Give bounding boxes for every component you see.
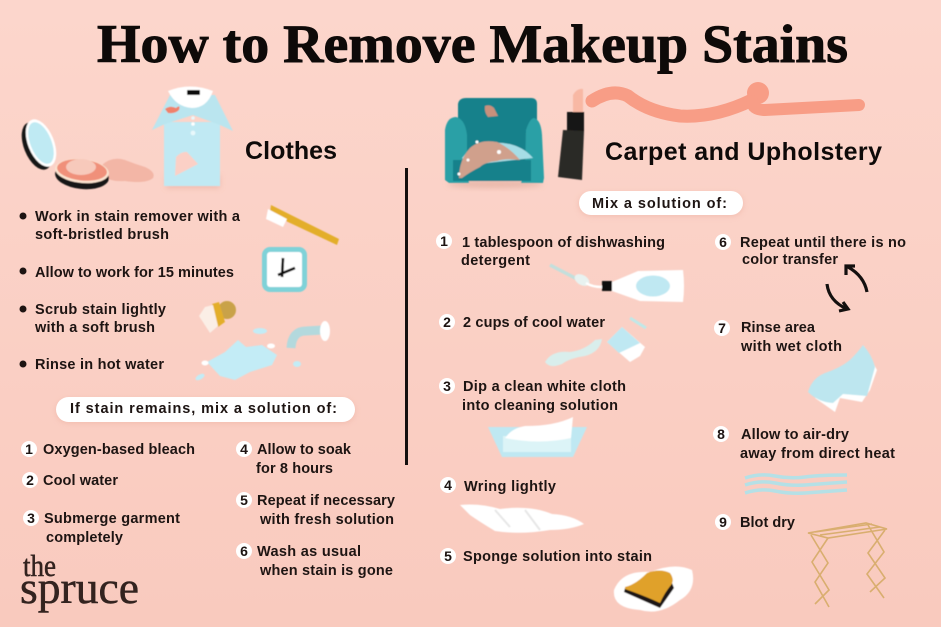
numbered steps: right column: 8	[717, 426, 725, 442]
icon: wet cloth	[808, 345, 877, 412]
title: How to Remove Makeup Stains	[97, 14, 848, 74]
numbered steps: right column: Rinse area	[741, 320, 816, 336]
numbered steps: clothes solution: Allow to soak	[257, 442, 352, 458]
bullet list: Allow to work for 15 minutes	[35, 265, 234, 281]
icon: air waves	[745, 475, 847, 493]
numbered steps: clothes solution: 5	[240, 492, 248, 508]
numbered steps: right column: away from direct heat	[740, 446, 895, 462]
numbered steps: right column: with wet cloth	[740, 339, 842, 355]
bullet list	[20, 209, 241, 373]
pill: if stain remains: If stain remains, mix a solution of:	[70, 401, 337, 417]
numbered steps: clothes solution	[21, 441, 395, 579]
pill: mix a solution	[579, 191, 743, 216]
numbered steps: clothes solution: Wash as usual	[257, 544, 361, 560]
icon: lipstick	[558, 89, 584, 180]
numbered steps: clothes solution: Repeat if necessary	[257, 493, 395, 509]
numbered steps: clothes solution: completely	[46, 530, 123, 546]
numbered steps: left column: 3	[443, 378, 451, 394]
numbered steps: left column: into cleaning solution	[462, 398, 618, 414]
numbered steps: clothes solution: 3	[27, 510, 35, 526]
bullet list: Work in stain remover with a	[35, 209, 241, 225]
panel: carpet and upholstery	[436, 82, 906, 612]
numbered steps: right column: Blot dry	[740, 515, 795, 531]
numbered steps: left column: 2	[443, 314, 451, 330]
pill: mix a solution: Mix a solution of:	[592, 196, 727, 212]
icon: lipstick smear	[592, 82, 859, 116]
panel: clothes	[16, 86, 395, 579]
numbered steps: right column: Allow to air-dry	[741, 427, 849, 443]
numbered steps: clothes solution: 2	[26, 472, 34, 488]
numbered steps: left column: 2 cups of cool water	[463, 315, 605, 331]
numbered steps: right column	[713, 234, 906, 531]
numbered steps: clothes solution: Oxygen-based bleach	[43, 442, 195, 458]
numbered steps: clothes solution: 1	[25, 441, 33, 457]
logo: the spruce: the	[23, 548, 56, 583]
numbered steps: left column: Wring lightly	[464, 479, 556, 495]
numbered steps: left column	[436, 233, 665, 565]
numbered steps: left column: 1	[440, 233, 448, 249]
numbered steps: clothes solution: with fresh solution	[259, 512, 394, 528]
numbered steps: left column: detergent	[461, 253, 530, 269]
icon: drying rack	[808, 523, 887, 607]
icon: makeup compact	[16, 115, 154, 192]
numbered steps: left column: Sponge solution into stain	[463, 549, 652, 565]
bullet list: Rinse in hot water	[35, 357, 164, 373]
icon: measuring cup and water	[545, 318, 646, 366]
divider	[405, 168, 408, 465]
icon: sponge	[614, 566, 693, 612]
numbered steps: clothes solution: for 8 hours	[256, 461, 333, 477]
pill: if stain remains	[56, 397, 355, 423]
icon: scrub brush	[199, 301, 236, 333]
icon: wrung cloth	[460, 504, 584, 533]
icon: clock	[262, 247, 307, 292]
logo: the spruce: spruce	[20, 563, 139, 613]
bullet list: soft-bristled brush	[35, 227, 169, 243]
icon: stained shirt	[152, 86, 233, 188]
icon: faucet and puddle	[194, 321, 330, 382]
icon: repeat arrows	[827, 266, 867, 311]
numbered steps: clothes solution: Cool water	[43, 473, 118, 489]
numbered steps: right column: 7	[718, 320, 726, 336]
numbered steps: left column: Dip a clean white cloth	[463, 379, 626, 395]
numbered steps: clothes solution: when stain is gone	[259, 563, 393, 579]
numbered steps: left column: 4	[444, 477, 452, 493]
icon: armchair	[445, 98, 544, 188]
heading: carpet and upholstery: Carpet and Upholstery	[605, 138, 882, 166]
numbered steps: right column: 9	[719, 514, 727, 530]
icon: toothbrush	[266, 205, 339, 245]
numbered steps: clothes solution: 4	[240, 441, 248, 457]
icon: detergent bottle and spoon	[550, 265, 684, 302]
bullet list: Scrub stain lightly	[35, 302, 166, 318]
numbered steps: clothes solution: Submerge garment	[44, 511, 180, 527]
numbered steps: right column: 6	[719, 234, 727, 250]
heading: clothes: Clothes	[245, 137, 337, 165]
numbered steps: left column: 5	[444, 548, 452, 564]
numbered steps: clothes solution: 6	[240, 543, 248, 559]
icon: basin with cloth	[488, 417, 587, 457]
numbered steps: right column: color transfer	[742, 252, 838, 268]
bullet list: with a soft brush	[34, 320, 155, 336]
numbered steps: right column: Repeat until there is no	[740, 235, 906, 251]
numbered steps: left column: 1 tablespoon of dishwashing	[462, 235, 665, 251]
